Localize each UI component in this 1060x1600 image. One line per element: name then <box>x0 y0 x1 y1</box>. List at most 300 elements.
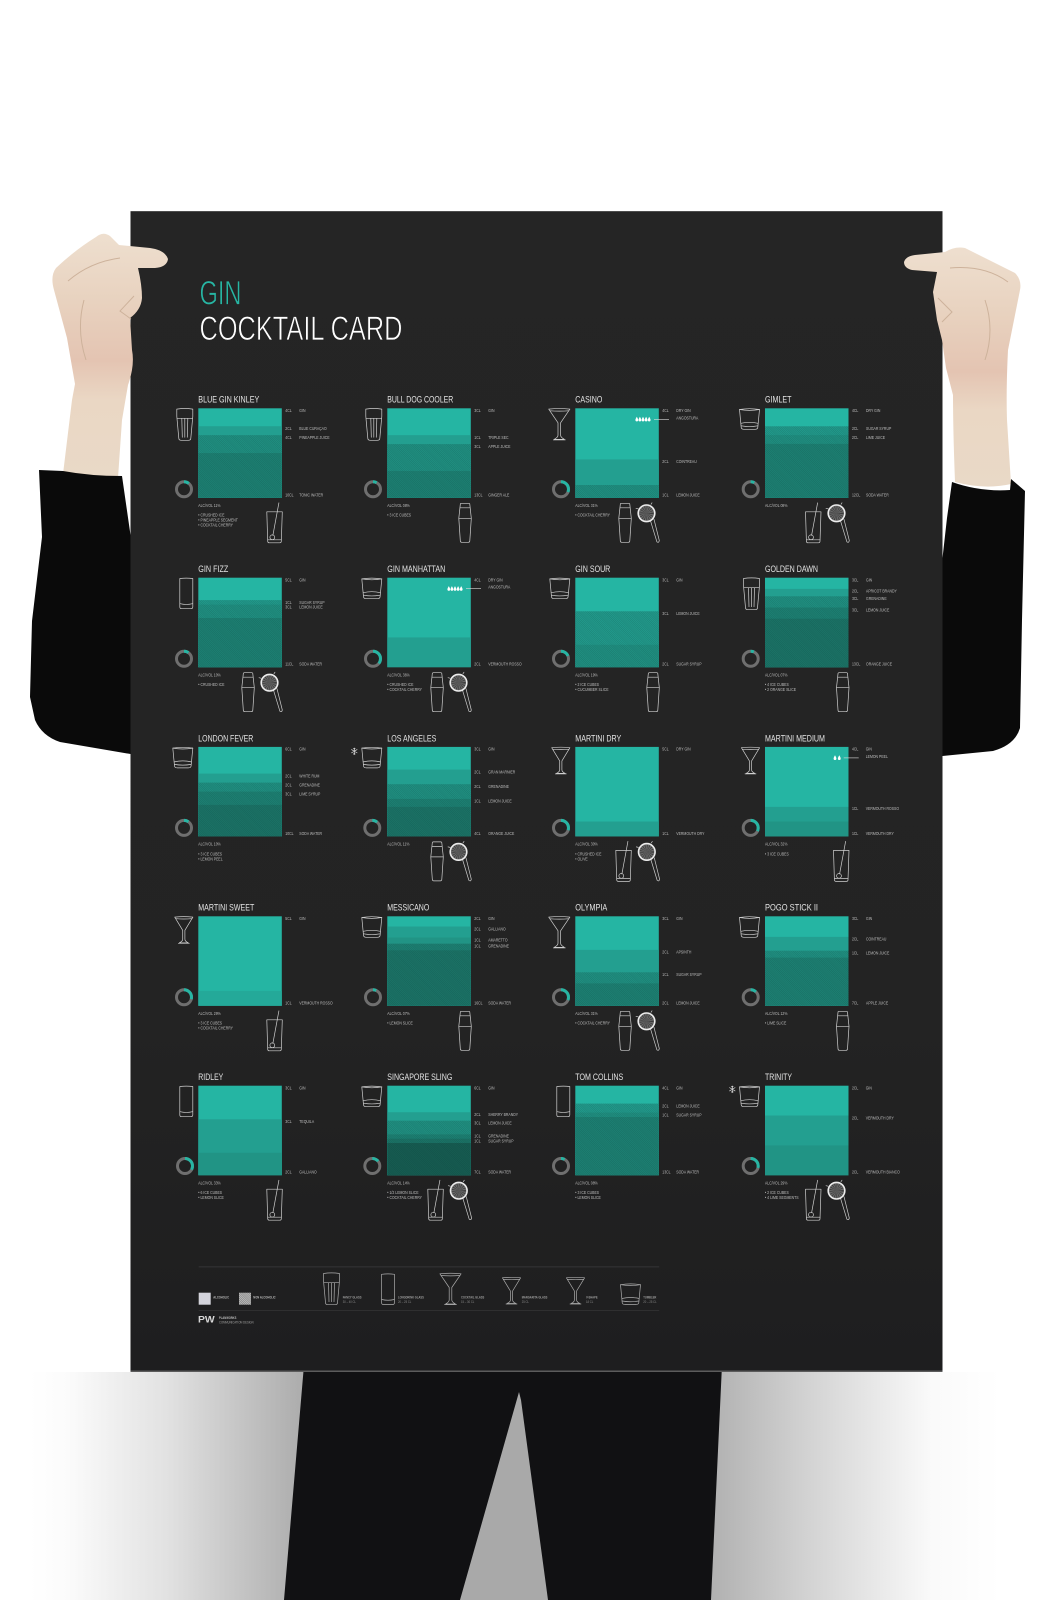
ingredient labels: APRICOT BRANDY <box>866 588 897 594</box>
swatch: non alcoholic: NON ALCOHOLIC <box>253 1295 276 1300</box>
ingredient labels: 3CL <box>852 607 859 612</box>
alcohol and garnish notes: • CRUSHED ICE <box>387 682 414 687</box>
ingredient labels: SODA WATER <box>866 492 889 497</box>
ingredient labels <box>474 916 511 1005</box>
ingredient labels: GINGER ALE <box>488 492 510 497</box>
heading: cocktail card: COCKTAIL CARD <box>200 310 402 348</box>
alcohol and garnish notes: ALC/VOL 07% <box>387 1010 410 1016</box>
ingredient labels: 3CL <box>474 408 481 413</box>
ingredient labels: GRENADINE <box>299 782 320 788</box>
ingredient labels: 2CL <box>662 949 669 955</box>
alcohol and garnish notes <box>765 672 796 692</box>
ingredient labels: SODA WATER <box>299 661 322 667</box>
ingredient labels: GIN <box>299 1085 305 1091</box>
alcohol donut <box>176 990 192 1005</box>
ingredient labels: 1CL <box>285 599 292 605</box>
alcohol donut <box>365 820 380 835</box>
right hand <box>904 248 1020 487</box>
icon: shaker <box>836 1011 849 1050</box>
panel: tom collins <box>554 1072 702 1200</box>
panel: martini dry <box>552 733 705 881</box>
ingredient labels: LEMON JUICE <box>676 611 700 616</box>
alcohol and garnish notes: ALC/VOL 07% <box>765 672 788 678</box>
alcohol and garnish notes: • 3 ICE CUBES <box>387 512 411 518</box>
ingredient labels: 4CL <box>285 408 292 413</box>
heading: BULL DOG COOLER <box>387 395 454 405</box>
alcohol donut <box>176 820 192 835</box>
layered chart <box>575 1086 659 1175</box>
icons: mixing glass and strainer <box>806 503 849 543</box>
alcohol and garnish notes: ALC/VOL 12% <box>765 1010 788 1016</box>
alcohol and garnish notes: • 4 LIME SEGMENTS <box>765 1195 799 1200</box>
panel: gin manhattan <box>362 564 522 712</box>
ingredient labels: LEMON JUICE <box>488 1120 512 1126</box>
ingredient labels: 2CL <box>474 926 481 931</box>
heading: SINGAPORE SLING <box>387 1072 452 1082</box>
ingredient labels: 7CL <box>474 1169 481 1175</box>
ingredient labels: LEMON JUICE <box>676 1103 700 1109</box>
icons: mixing glass and strainer <box>428 1180 472 1220</box>
ingredient labels <box>662 408 700 497</box>
ingredient labels: GIN <box>299 746 305 752</box>
alcohol and garnish notes: ALC/VOL 36% <box>387 672 410 678</box>
icon: tumbler <box>173 747 193 768</box>
alcohol and garnish notes <box>198 1010 233 1031</box>
layered chart <box>387 747 471 836</box>
ingredient labels: 1CL <box>474 943 481 949</box>
ingredient labels: 2CL <box>474 783 481 789</box>
ingredient labels: SUGAR SYRUP <box>676 661 702 667</box>
ingredient labels: 3CL <box>285 1085 292 1091</box>
ingredient labels: 10CL <box>285 492 294 497</box>
alcohol and garnish notes: • COCKTAIL CHERRY <box>198 522 233 528</box>
alcohol donut <box>366 990 380 1005</box>
layered chart <box>765 408 848 498</box>
alcohol and garnish notes: ALC/VOL 19% <box>575 672 598 678</box>
alcohol and garnish notes: • LEMON PEEL <box>198 856 223 861</box>
ingredient labels: SUGAR SYRUP <box>866 426 891 431</box>
ingredient labels <box>852 746 900 836</box>
alcohol and garnish notes <box>575 841 602 861</box>
ingredient labels: 2CL <box>852 1169 859 1175</box>
ingredient labels: 1CL <box>474 1138 481 1144</box>
ingredient labels <box>474 1085 518 1175</box>
heading: BLUE GIN KINLEY <box>198 395 259 405</box>
ingredient labels: 1CL <box>662 492 669 497</box>
panel: singapore sling <box>362 1072 518 1220</box>
alcohol and garnish notes: • CRUSHED ICE <box>575 851 602 856</box>
ingredient labels: LEMON JUICE <box>676 492 700 497</box>
ingredient labels: LIME SYRUP <box>299 791 321 797</box>
ingredient labels: LEMON JUICE <box>866 950 890 956</box>
panel: gin fizz <box>176 564 325 712</box>
panel: casino <box>549 395 700 542</box>
ingredient labels: GIN <box>866 577 872 583</box>
legend glass: longdrink: LONGDRINK GLASS <box>398 1295 425 1300</box>
swatch: alcoholic: ALCOHOLIC <box>213 1295 230 1300</box>
icon: tumbler <box>362 917 382 937</box>
alcohol and garnish notes: ALC/VOL 30% <box>575 841 598 847</box>
ingredient labels: WHITE RUM <box>299 773 320 779</box>
heading: CASINO <box>575 395 602 405</box>
heading: MARTINI MEDIUM <box>765 733 825 743</box>
alcohol and garnish notes <box>387 1180 422 1200</box>
ingredient labels: 1CL <box>285 1000 292 1005</box>
panel: blue gin kinley <box>176 395 330 543</box>
ingredient labels: 4CL <box>474 577 481 583</box>
ingredient labels: 2CL <box>285 773 292 779</box>
ingredient labels: 2CL <box>662 1000 669 1005</box>
alcohol and garnish notes: • COCKTAIL CHERRY <box>387 1195 422 1200</box>
heading: gin: GIN <box>200 274 242 312</box>
alcohol and garnish notes: • 2 ORANGE SLICE <box>765 687 796 692</box>
ingredient labels: SUGAR SYRUP <box>676 1112 702 1117</box>
alcohol and garnish notes <box>198 841 223 861</box>
alcohol donut <box>366 482 380 497</box>
layered chart <box>198 578 282 667</box>
alcohol and garnish notes <box>575 1010 610 1026</box>
ingredient labels: SUGAR SYRUP <box>299 599 325 605</box>
legend glass: v-shape: V-SHAPE <box>586 1295 598 1300</box>
panel: messicano <box>362 903 511 1050</box>
ingredient labels: 13CL <box>662 1169 671 1175</box>
ingredient labels <box>662 746 705 836</box>
ingredient labels <box>852 916 890 1005</box>
ingredient labels: 1CL <box>662 1112 669 1117</box>
ingredient labels: GIN <box>866 1085 872 1091</box>
alcohol donut <box>743 1158 758 1174</box>
icon: tumbler <box>740 409 760 429</box>
icons: shaker and strainer <box>431 672 471 712</box>
alcohol and garnish notes: • 2 ICE CUBES <box>575 682 599 687</box>
alcohol and garnish notes: ALC/VOL 32% <box>765 841 788 847</box>
alcohol and garnish notes: ALC/VOL 29% <box>198 1010 221 1016</box>
icon: v-shape glass <box>175 917 193 943</box>
ingredient labels: LEMON JUICE <box>676 1000 700 1005</box>
legend glass: cocktail: COCKTAIL GLASS <box>461 1295 485 1300</box>
alcohol and garnish notes: • 6 ICE CUBES <box>198 1190 222 1195</box>
ingredient labels: GIN <box>299 916 305 921</box>
ingredient labels: 4CL <box>474 830 481 836</box>
ingredient labels: BLUE CURAÇAO <box>299 425 327 431</box>
legend glass: fancy: 30 – 40 CL <box>343 1300 356 1304</box>
legend glass: v-shape <box>566 1277 598 1304</box>
alcohol and garnish notes: ALC/VOL 29% <box>765 1180 788 1186</box>
ingredient labels: 2CL <box>852 1115 859 1120</box>
ingredient labels: GALLIANO <box>488 926 506 931</box>
ingredient labels <box>285 577 325 667</box>
ingredient labels: GIN <box>676 1085 682 1091</box>
ingredient labels: 2CL <box>852 588 859 594</box>
panel: bull dog cooler <box>366 395 511 542</box>
swatch: alcoholic <box>199 1293 230 1305</box>
panel: gimlet <box>740 395 891 543</box>
drops: lemon peel <box>834 755 859 760</box>
alcohol donut <box>743 820 758 835</box>
ingredient labels: 5CL <box>285 916 292 921</box>
ingredient labels: ORANGE JUICE <box>488 830 515 836</box>
alcohol and garnish notes: ALC/VOL 11% <box>198 502 221 508</box>
icon: shaker <box>836 673 849 712</box>
icon: tumbler <box>362 1086 382 1107</box>
icon: v-shape glass <box>552 747 570 774</box>
ingredient labels: TONIC WATER <box>299 492 323 497</box>
layered chart <box>198 747 282 836</box>
panel: pogo stick ii <box>740 903 890 1050</box>
alcohol and garnish notes: • 2 ICE CUBES <box>765 1190 789 1195</box>
ingredient labels: SUGAR SYRUP <box>488 1138 514 1144</box>
ingredient labels: VERMOUTH DRY <box>866 1115 894 1120</box>
ingredient labels: 5CL <box>662 746 669 752</box>
alcohol and garnish notes: • COCKTAIL CHERRY <box>575 512 610 518</box>
icon: mixing glass <box>267 1011 282 1051</box>
ingredient labels <box>474 746 515 836</box>
layered chart <box>575 916 659 1006</box>
alcohol donut <box>743 651 758 666</box>
heading: GIN MANHATTAN <box>387 564 445 574</box>
ingredient labels: ANGOSTURA <box>676 415 698 420</box>
panel: martini sweet <box>175 903 333 1051</box>
ingredient labels: VERMOUTH ROSSO <box>866 805 900 811</box>
legend glass: margarita: MARGARITA GLASS <box>522 1295 548 1300</box>
alcohol and garnish notes: ALC/VOL 10% <box>198 672 221 678</box>
legend glass: fancy <box>324 1273 362 1305</box>
layered chart <box>765 747 848 836</box>
ingredient labels: 2CL <box>474 769 481 775</box>
ingredient labels: LEMON JUICE <box>866 607 890 612</box>
panel: olympia <box>549 903 702 1050</box>
heading: GOLDEN DAWN <box>765 564 818 574</box>
alcohol and garnish notes: ALC/VOL 10% <box>198 841 221 847</box>
ingredient labels: 6CL <box>474 1085 481 1091</box>
icons: mixing glass and strainer <box>806 1180 849 1220</box>
alcohol and garnish notes: ALC/VOL 08% <box>387 502 410 508</box>
alcohol and garnish notes: ALC/VOL 31% <box>575 502 598 508</box>
alcohol donut <box>743 482 758 497</box>
left sleeve <box>30 470 130 754</box>
ingredient labels: VERMOUTH BIANCO <box>866 1169 900 1175</box>
left hand <box>52 234 168 478</box>
layered chart <box>387 1086 471 1175</box>
ingredient labels: GRENADINE <box>488 1133 509 1139</box>
alcohol and garnish notes <box>575 672 609 692</box>
heading: GIMLET <box>765 395 792 405</box>
ingredient labels: 1CL <box>852 830 859 836</box>
alcohol and garnish notes <box>387 502 411 518</box>
alcohol and garnish notes: • CRUSHED ICE <box>198 682 225 687</box>
ingredient labels: PINEAPPLE JUICE <box>299 434 330 440</box>
panel: martini medium <box>741 733 900 881</box>
alcohol and garnish notes: • 3 ICE CUBES <box>575 1190 599 1195</box>
ingredient labels: COINTREAU <box>866 936 886 942</box>
ingredient labels: 16CL <box>474 1000 483 1005</box>
icon: shaker <box>459 1011 471 1050</box>
alcohol donut <box>176 482 192 497</box>
ingredient labels: LIME JUICE <box>866 434 885 440</box>
ingredient labels: 2CL <box>474 661 481 667</box>
layered chart <box>387 408 471 498</box>
icon: snowflake <box>729 1086 735 1093</box>
ingredient labels: GIN <box>299 408 305 413</box>
alcohol donut <box>366 651 380 666</box>
alcohol and garnish notes: • COCKTAIL CHERRY <box>575 1020 610 1026</box>
ingredient labels: 3CL <box>474 746 481 752</box>
floor shadow below poster <box>30 1372 1000 1600</box>
ingredient labels: 2CL <box>852 426 859 431</box>
ingredient labels <box>474 577 522 667</box>
ingredient labels: GIN <box>676 916 682 921</box>
alcohol and garnish notes: • 3 ICE CUBES <box>198 1020 222 1026</box>
ingredient labels: 3CL <box>285 1119 292 1124</box>
ingredient labels: LEMON JUICE <box>488 798 512 804</box>
heading: TRINITY <box>765 1072 792 1082</box>
icon: fancy glass <box>744 578 760 610</box>
legend glass: tumbler: 20 – 25 CL <box>643 1300 657 1304</box>
icons: shaker and strainer <box>619 503 659 542</box>
icon: fancy glass <box>366 408 382 440</box>
ingredient labels: SODA WATER <box>676 1169 699 1175</box>
alcohol donut <box>554 820 568 835</box>
heading: GIN SOUR <box>575 564 611 574</box>
alcohol and garnish notes: • LEMON SLICE <box>575 1195 601 1200</box>
ingredient labels: SODA WATER <box>299 830 322 836</box>
legend glass: v-shape: 18 CL <box>586 1300 593 1304</box>
ingredient labels <box>852 577 897 667</box>
ingredient labels <box>285 746 322 836</box>
alcohol and garnish notes: ALC/VOL 31% <box>575 1010 598 1016</box>
ingredient labels: APPLE JUICE <box>488 443 511 449</box>
layered chart <box>198 916 282 1006</box>
icons: shaker and strainer <box>242 672 282 712</box>
ingredient labels: GIN <box>488 746 494 752</box>
alcohol note: ALC/VOL 11% <box>387 841 410 847</box>
ingredient labels: 3CL <box>662 611 669 616</box>
ingredient labels: ANGOSTURA <box>488 584 510 590</box>
ingredient labels <box>285 1085 317 1175</box>
ingredient labels <box>474 408 511 497</box>
panel: trinity <box>729 1072 900 1220</box>
icon: longdrink glass <box>557 1086 570 1117</box>
alcohol and garnish notes: • PINEAPPLE SEGMENT <box>198 517 238 523</box>
ingredient labels: VERMOUTH ROSSO <box>299 1000 333 1005</box>
alcohol and garnish notes <box>198 1180 224 1200</box>
alcohol and garnish notes: • LEMON SLICE <box>198 1195 224 1200</box>
icons: mixing glass and strainer <box>616 841 660 881</box>
ingredient labels: GIN <box>866 916 872 921</box>
ingredient labels: 12CL <box>852 492 861 497</box>
legend glass: tumbler <box>620 1284 657 1304</box>
ingredient labels: LEMON PEEL <box>866 753 888 759</box>
panel: golden dawn <box>743 564 897 712</box>
ingredient labels: AMARETTO <box>488 937 508 942</box>
logo: planworks: COMMUNICATION DESIGN <box>219 1320 254 1325</box>
alcohol and garnish notes <box>387 672 422 692</box>
layered chart <box>765 578 848 667</box>
icon: tumbler <box>362 747 382 768</box>
ingredient labels <box>662 1085 702 1175</box>
alcohol and garnish notes <box>575 502 610 518</box>
layered chart <box>198 408 282 498</box>
ingredient labels: 2CL <box>662 459 669 464</box>
drops: angostura <box>635 417 669 421</box>
ingredient labels <box>662 916 702 1005</box>
ingredient labels: VERMOUTH ROSSO <box>488 661 522 667</box>
ingredient labels: 2CL <box>285 782 292 788</box>
layered chart <box>765 1086 848 1175</box>
ingredient labels: 11CL <box>285 661 294 667</box>
heading: MARTINI DRY <box>575 733 621 743</box>
trousers <box>284 1365 722 1600</box>
ingredient labels: APSINTH <box>676 949 691 955</box>
right sleeve <box>942 479 1025 756</box>
ingredient labels: 4CL <box>852 408 859 413</box>
ingredient labels: 2CL <box>662 1103 669 1109</box>
ingredient labels: 5CL <box>285 577 292 583</box>
alcohol and garnish notes: • 3 ICE CUBES <box>198 851 222 856</box>
ingredient labels: GIN <box>299 577 305 583</box>
ingredient labels <box>285 916 333 1005</box>
ingredient labels: 1CL <box>662 972 669 977</box>
heading: TOM COLLINS <box>575 1072 623 1082</box>
drops: angostura <box>447 586 481 591</box>
logo: planworks: PLANWORKS <box>219 1316 237 1320</box>
ingredient labels: APPLE JUICE <box>866 1000 888 1005</box>
layered chart <box>765 916 848 1006</box>
alcohol and garnish notes: • COCKTAIL CHERRY <box>387 687 422 692</box>
ingredient labels: 2CL <box>474 916 481 921</box>
ingredient labels: 2CL <box>285 425 292 431</box>
ingredient labels: SODA WATER <box>488 1169 511 1175</box>
icon: tumbler <box>740 1086 760 1107</box>
ingredient labels: 4CL <box>662 1085 669 1091</box>
panel: gin sour <box>550 564 702 712</box>
ingredient labels: 1CL <box>662 830 669 836</box>
ingredient labels: SHERRY BRANDY <box>488 1111 518 1117</box>
legend glass: cocktail <box>440 1273 485 1305</box>
ingredient labels: 1CL <box>474 798 481 804</box>
ingredient labels: ORANGE JUICE <box>866 661 892 667</box>
alcohol and garnish notes: • 3 ICE CUBES <box>765 851 789 856</box>
ingredient labels: GIN <box>676 577 682 583</box>
poster <box>130 211 942 1372</box>
alcohol and garnish notes <box>765 841 789 856</box>
ingredient labels: SODA WATER <box>488 1000 511 1005</box>
ingredient labels <box>852 408 891 497</box>
layered chart <box>387 916 471 1006</box>
heading: MESSICANO <box>387 903 429 913</box>
logo: planworks <box>198 1315 254 1326</box>
ingredient labels: GIN <box>488 916 494 921</box>
layered chart <box>198 1086 282 1175</box>
ingredient labels: GIN <box>866 746 872 752</box>
ingredient labels: 2CL <box>474 1111 481 1117</box>
ingredient labels: 3CL <box>852 577 859 583</box>
ingredient labels: 3CL <box>285 791 292 797</box>
ingredient labels: GRENADINE <box>488 943 509 949</box>
alcohol and garnish notes: • OLIVE <box>575 856 588 861</box>
heading: GIN FIZZ <box>198 564 229 574</box>
ingredient labels: 4CL <box>285 434 292 440</box>
heading: OLYMPIA <box>575 903 608 913</box>
alcohol donut <box>554 651 568 666</box>
ingredient labels: 3CL <box>662 916 669 921</box>
layered chart <box>575 578 659 667</box>
ingredient labels: DRY GIN <box>866 408 880 413</box>
ingredient labels: 6CL <box>285 746 292 752</box>
swatch: non alcoholic <box>239 1293 276 1305</box>
alcohol and garnish notes: • COCKTAIL CHERRY <box>198 1025 233 1031</box>
ingredient labels: VERMOUTH DRY <box>676 830 705 836</box>
